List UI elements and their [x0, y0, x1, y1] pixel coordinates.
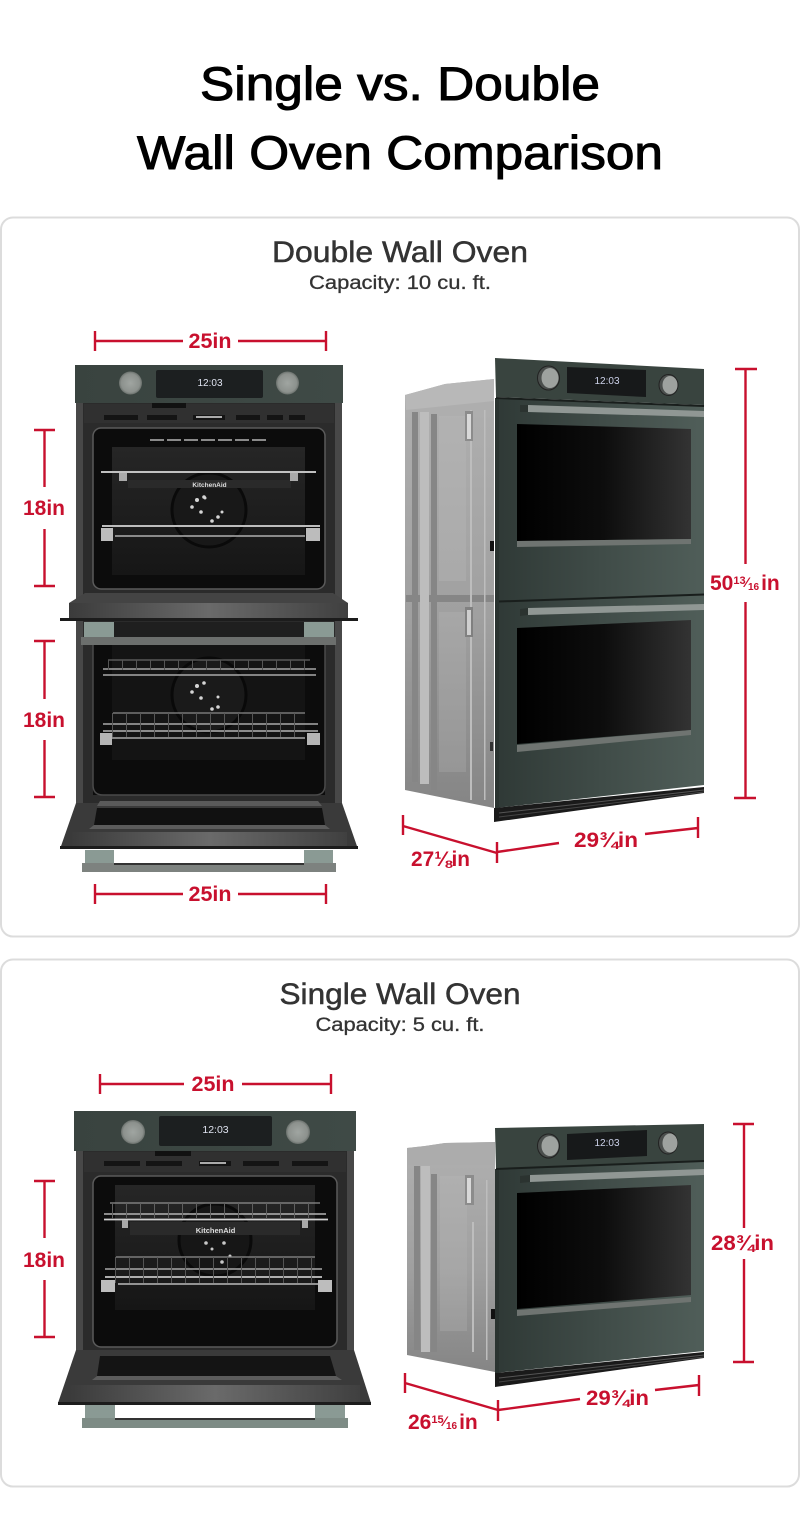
oven: single side view	[407, 1124, 704, 1387]
dimension: 50 13/16 in height	[710, 369, 780, 798]
dimension: 25in	[100, 1073, 331, 1096]
dimension: 27 1/8 in depth: 27⅛in	[411, 848, 470, 871]
heading: single wall oven: Single Wall Oven	[280, 978, 520, 1011]
dimension: 26 15/16 in depth	[405, 1373, 498, 1434]
oven: double side view	[405, 358, 704, 822]
dimension: 29 3/4 in width: 29¾in	[574, 829, 638, 852]
title	[137, 57, 663, 179]
dimension: 18in: 18in	[23, 1249, 65, 1272]
dimension: 28 3/4 in height: 28¾in	[711, 1232, 774, 1255]
capacity: 5 cu. ft.: Capacity: 5 cu. ft.	[316, 1015, 484, 1036]
dimension: 50 13/16 in height: 50	[710, 572, 733, 595]
title: Wall Oven Comparison	[137, 126, 663, 179]
capacity: 10 cu. ft.: Capacity: 10 cu. ft.	[309, 273, 491, 294]
dimension: 18in upper	[23, 430, 65, 586]
dimension: 26 15/16 in depth: in	[459, 1411, 478, 1434]
title: Single vs. Double	[200, 57, 600, 110]
oven: single front open: KitchenAid	[196, 1226, 236, 1235]
oven: single side view: 12:03	[594, 1138, 620, 1149]
dimension: 50 13/16 in height: in	[761, 572, 780, 595]
dimension: 50 13/16 in height: 16	[748, 582, 760, 593]
dimension: 18in	[23, 1181, 65, 1337]
dimension: 26 15/16 in depth: 15	[431, 1414, 444, 1426]
heading: double wall oven: Double Wall Oven	[272, 236, 528, 269]
dimension: 25in top	[95, 330, 326, 353]
dimension: 50 13/16 in height: 13	[733, 575, 746, 587]
dimension: 25in bottom: 25in	[188, 883, 232, 906]
oven: single front open	[58, 1111, 371, 1428]
oven: double front open	[60, 365, 358, 872]
dimension: 18in upper: 18in	[23, 497, 65, 520]
dimension: 18in lower: 18in	[23, 709, 65, 732]
dimension: 25in top: 25in	[188, 330, 232, 353]
dimension: 26 15/16 in depth: 26	[408, 1411, 431, 1434]
panel: double wall oven	[1, 218, 799, 936]
dimension: 29 3/4 in width	[497, 817, 698, 863]
dimension: 25in: 25in	[192, 1073, 234, 1096]
oven: single front open: 12:03	[202, 1124, 229, 1136]
dimension: 29 3/4 in width: 29¾in	[586, 1387, 649, 1410]
oven: double side view: 12:03	[594, 376, 620, 387]
dimension: 26 15/16 in depth: ⁄	[441, 1413, 449, 1429]
dimension: 26 15/16 in depth: 16	[446, 1421, 458, 1432]
dimension: 27 1/8 in depth	[403, 815, 497, 871]
oven: double front open: 12:03	[197, 378, 223, 389]
panel: single wall oven	[1, 960, 799, 1486]
dimension: 50 13/16 in height: ⁄	[743, 574, 751, 590]
dimension: 29 3/4 in width	[498, 1375, 699, 1421]
dimension: 28 3/4 in height	[711, 1124, 774, 1362]
dimension: 18in lower	[23, 641, 65, 797]
oven: double front open: KitchenAid	[192, 482, 227, 489]
dimension: 25in bottom	[95, 883, 326, 906]
